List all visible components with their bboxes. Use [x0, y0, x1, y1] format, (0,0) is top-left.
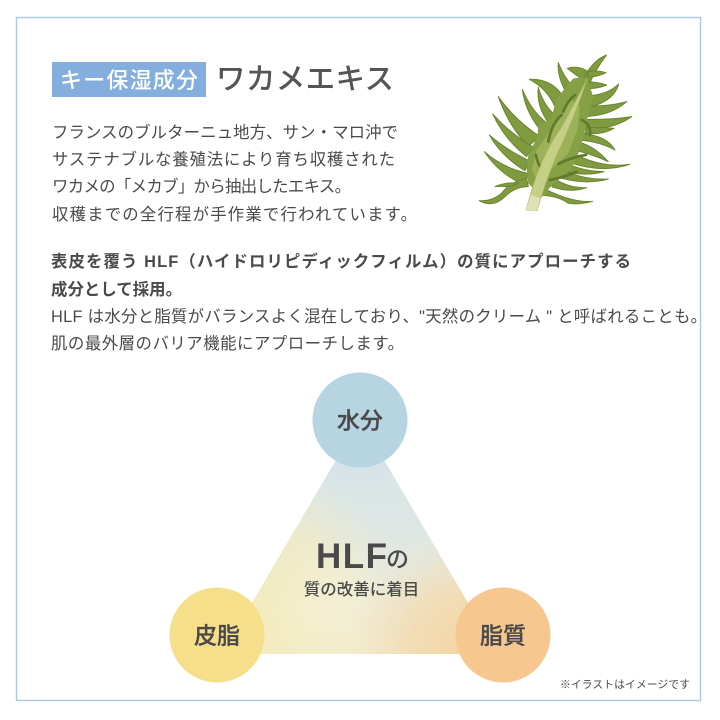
center label	[304, 537, 419, 599]
bold statement: 成分として採用。	[51, 280, 182, 299]
heading badge: キー保湿成分	[60, 68, 198, 93]
circle: water: 水分	[337, 408, 383, 434]
intro paragraph: フランスのブルターニュ地方、サン・マロ沖で	[52, 123, 398, 142]
diagram: HLF triangle	[170, 372, 550, 682]
intro paragraph: ワカメの「メカブ」から抽出したエキス。	[52, 177, 351, 196]
footnote: ※イラストはイメージです	[560, 678, 690, 691]
HLF explanation: HLF は水分と脂質がバランスよく混在しており、"天然のクリーム " と呼ばれることも。	[51, 308, 707, 326]
HLF explanation	[51, 308, 707, 353]
blade body	[527, 77, 593, 197]
heading: key ingredient	[52, 62, 394, 97]
circle: lipid: 脂質	[480, 622, 526, 648]
circle: lipid	[456, 588, 550, 682]
gradient triangle	[252, 460, 468, 654]
HLF explanation: 肌の最外層のバリア機能にアプローチします。	[51, 335, 404, 353]
center label: HLF	[316, 537, 387, 576]
bold statement: 表皮を覆う HLF（ハイドロリピディックフィルム）の質にアプローチする	[51, 252, 631, 271]
circle: sebum	[170, 588, 264, 682]
illustration: wakame seaweed	[479, 55, 632, 211]
bold statement	[51, 252, 631, 299]
heading badge	[52, 62, 206, 97]
heading title: ワカメエキス	[216, 63, 394, 96]
intro paragraph	[52, 123, 417, 224]
intro paragraph: 収穫までの全行程が手作業で行われています。	[52, 206, 417, 224]
center label: の	[386, 546, 409, 572]
fronds	[479, 55, 632, 204]
midrib stem	[526, 78, 587, 211]
blade shadows	[536, 95, 590, 180]
center label: 質の改善に着目	[304, 580, 419, 599]
intro paragraph: サステナブルな養殖法により育ち収穫された	[52, 150, 395, 169]
blade highlights	[532, 100, 580, 182]
circle: water	[312, 372, 408, 468]
circle: sebum: 皮脂	[194, 622, 240, 648]
